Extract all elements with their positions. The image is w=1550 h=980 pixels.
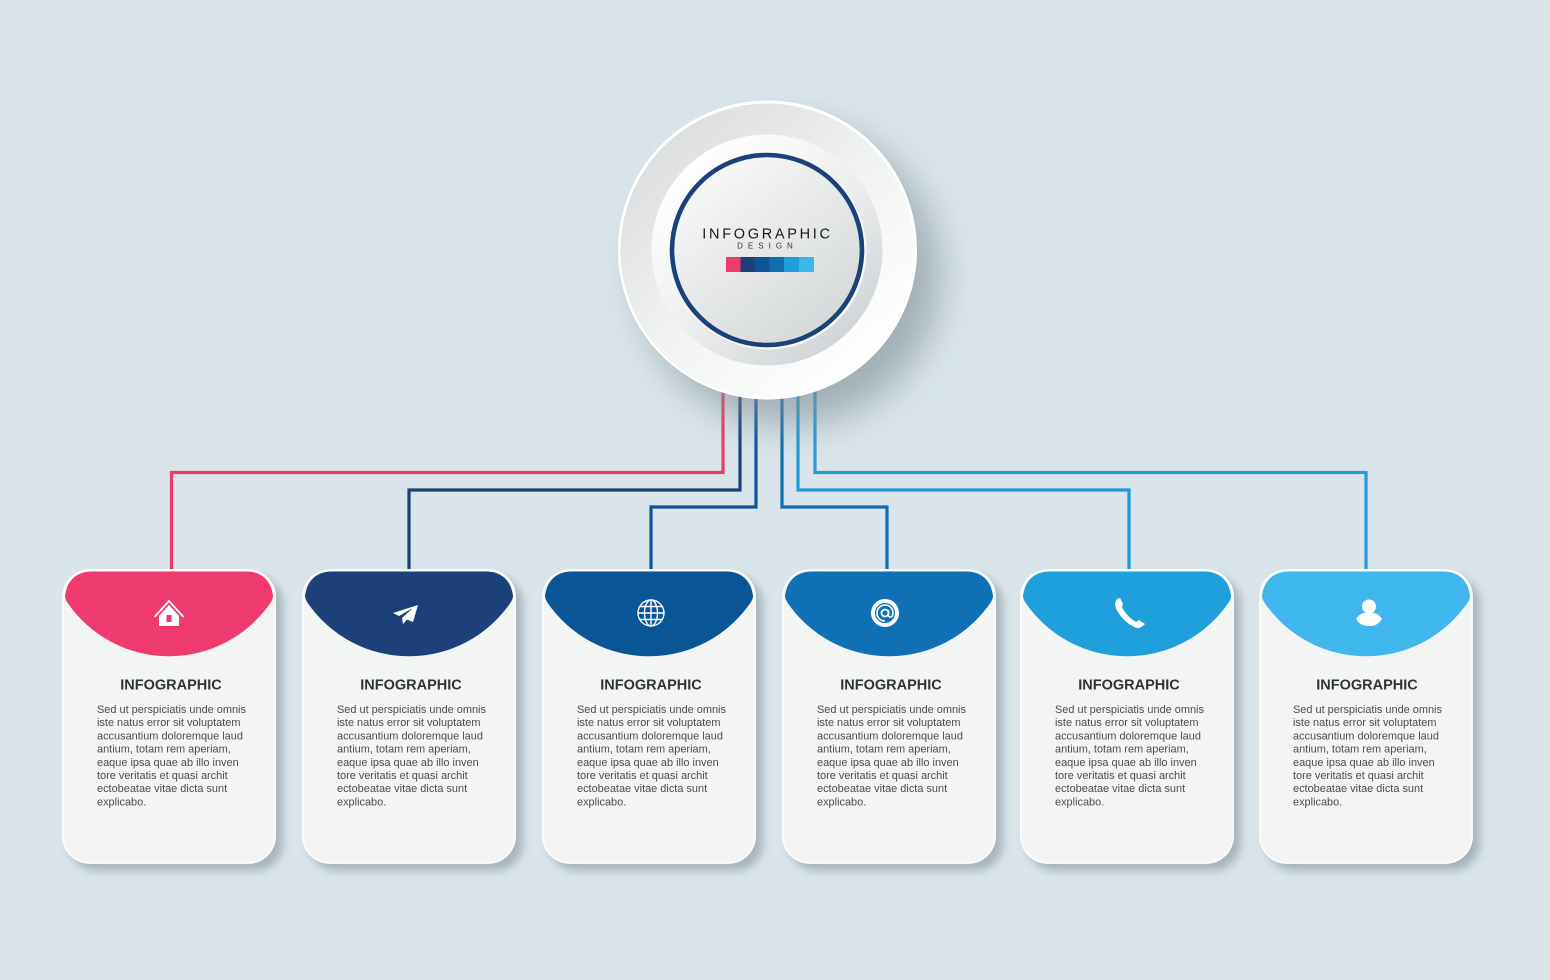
card text: eaque ipsa quae ab illo inven — [1055, 757, 1197, 769]
icon: paper plane — [393, 605, 418, 624]
card text: tore veritatis et quasi archit — [337, 770, 468, 782]
card text: Sed ut perspiciatis unde omnis — [817, 704, 966, 716]
card text: iste natus error sit voluptatem — [577, 717, 720, 729]
card title: INFOGRAPHIC — [360, 678, 462, 694]
card text: iste natus error sit voluptatem — [1055, 717, 1198, 729]
card header — [305, 572, 513, 656]
panel: card 2 — [303, 570, 515, 863]
card text: antium, totam rem aperiam, — [1293, 744, 1427, 756]
icon: phone — [1115, 598, 1145, 628]
card body — [1021, 570, 1233, 863]
card text: accusantium doloremque laud — [577, 730, 723, 742]
badge subtitle: DESIGN — [737, 242, 798, 250]
card header — [65, 572, 273, 656]
card text: explicabo. — [337, 796, 386, 808]
card text: explicabo. — [1055, 796, 1104, 808]
card text: Sed ut perspiciatis unde omnis — [337, 704, 486, 716]
card text: ectobeatae vitae dicta sunt — [817, 783, 947, 795]
card header — [1023, 572, 1231, 656]
card text: accusantium doloremque laud — [337, 730, 483, 742]
icon: at sign — [873, 601, 897, 625]
card title: INFOGRAPHIC — [840, 678, 942, 694]
card title: INFOGRAPHIC — [1316, 678, 1418, 694]
central circle badge — [618, 100, 940, 425]
card text: Sed ut perspiciatis unde omnis — [97, 704, 246, 716]
card title: INFOGRAPHIC — [1078, 678, 1180, 694]
card body — [783, 570, 995, 863]
card text: iste natus error sit voluptatem — [337, 717, 480, 729]
connector: pink — [172, 385, 723, 569]
panel: card 4 — [783, 570, 995, 863]
card body — [543, 570, 755, 863]
card text: tore veritatis et quasi archit — [577, 770, 708, 782]
card text: antium, totam rem aperiam, — [1055, 744, 1189, 756]
card text: iste natus error sit voluptatem — [817, 717, 960, 729]
card text: tore veritatis et quasi archit — [1293, 770, 1424, 782]
inner disc with navy ring — [670, 152, 866, 350]
card text: eaque ipsa quae ab illo inven — [817, 757, 959, 769]
icon: globe — [638, 600, 664, 626]
card text: accusantium doloremque laud — [1055, 730, 1201, 742]
outer ring — [618, 100, 917, 400]
card header — [545, 572, 753, 656]
card text: explicabo. — [817, 796, 866, 808]
connector: dark blue — [651, 385, 756, 569]
connector: light blue — [815, 385, 1366, 569]
card text: ectobeatae vitae dicta sunt — [1293, 783, 1423, 795]
card text: antium, totam rem aperiam, — [577, 744, 711, 756]
badge shadow — [640, 125, 940, 425]
panel: card 5 — [1021, 570, 1233, 863]
card title: INFOGRAPHIC — [600, 678, 702, 694]
card text: eaque ipsa quae ab illo inven — [1293, 757, 1435, 769]
colour bar — [726, 257, 814, 272]
card header — [785, 572, 993, 656]
card text: tore veritatis et quasi archit — [97, 770, 228, 782]
badge title: INFOGRAPHIC — [702, 226, 833, 242]
card body — [303, 570, 515, 863]
connector: navy — [409, 385, 740, 569]
connector: medium blue — [782, 385, 887, 569]
card text: accusantium doloremque laud — [1293, 730, 1439, 742]
middle ring — [652, 134, 882, 366]
card text: antium, totam rem aperiam, — [817, 744, 951, 756]
card text: tore veritatis et quasi archit — [1055, 770, 1186, 782]
card text: ectobeatae vitae dicta sunt — [1055, 783, 1185, 795]
connector: sky blue — [798, 385, 1129, 569]
card text: explicabo. — [577, 796, 626, 808]
icon: user — [1356, 600, 1382, 626]
card body — [1260, 570, 1472, 863]
panel: card 6 — [1260, 570, 1472, 863]
card text: eaque ipsa quae ab illo inven — [97, 757, 239, 769]
card text: ectobeatae vitae dicta sunt — [97, 783, 227, 795]
card text: ectobeatae vitae dicta sunt — [577, 783, 707, 795]
card text: iste natus error sit voluptatem — [97, 717, 240, 729]
panel: card 3 — [543, 570, 755, 863]
card text: ectobeatae vitae dicta sunt — [337, 783, 467, 795]
card text: antium, totam rem aperiam, — [97, 744, 231, 756]
card title: INFOGRAPHIC — [120, 678, 222, 694]
card text: eaque ipsa quae ab illo inven — [337, 757, 479, 769]
card text: explicabo. — [97, 796, 146, 808]
card text: explicabo. — [1293, 796, 1342, 808]
card text: tore veritatis et quasi archit — [817, 770, 948, 782]
card text: Sed ut perspiciatis unde omnis — [577, 704, 726, 716]
card header — [1262, 572, 1470, 656]
icon: house — [154, 601, 184, 626]
panel: card 1 — [63, 570, 275, 863]
card text: accusantium doloremque laud — [97, 730, 243, 742]
card text: Sed ut perspiciatis unde omnis — [1055, 704, 1204, 716]
card body — [63, 570, 275, 863]
card text: iste natus error sit voluptatem — [1293, 717, 1436, 729]
connector lines — [172, 385, 1366, 569]
card text: eaque ipsa quae ab illo inven — [577, 757, 719, 769]
card text: accusantium doloremque laud — [817, 730, 963, 742]
card text: Sed ut perspiciatis unde omnis — [1293, 704, 1442, 716]
card text: antium, totam rem aperiam, — [337, 744, 471, 756]
